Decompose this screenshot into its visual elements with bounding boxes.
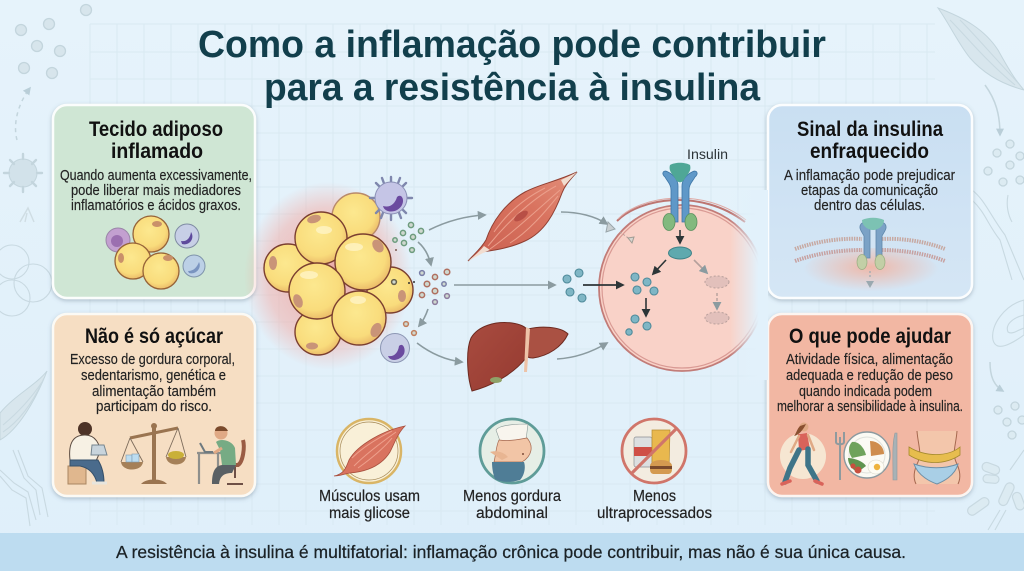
signalling arrows and molecules <box>563 222 729 335</box>
benefit: muscles use more glucose <box>319 419 420 522</box>
heading: tecido adiposo: Tecido adiposo <box>89 117 223 141</box>
arrows to target cell <box>557 212 607 359</box>
label: músculos usam mais glicose: mais glicose <box>329 505 410 522</box>
icon: insulin receptor <box>663 163 697 230</box>
icon: spiky immune cell <box>370 177 412 220</box>
label: menos gordura abdominal <box>463 488 561 522</box>
panel: o que pode ajudar <box>768 314 972 496</box>
background decoration: right side <box>938 8 1024 530</box>
text: o que pode ajudar body <box>777 352 963 415</box>
panel: não é só açúcar <box>53 314 255 496</box>
text: não é só açúcar body: participam do risco. <box>96 399 212 415</box>
heading: sinal da insulina <box>797 117 944 163</box>
inflammatory mediators <box>392 222 450 335</box>
label: músculos usam mais glicose: Músculos usam <box>319 488 420 505</box>
text: sinal da insulina body <box>784 168 955 214</box>
icon: person at desk <box>197 426 244 484</box>
panel: sinal da insulina enfraquecido <box>768 105 972 298</box>
fat cell cluster <box>264 193 413 355</box>
text: tecido adiposo body <box>60 168 252 214</box>
benefit: fewer ultra-processed foods <box>597 419 712 522</box>
text: tecido adiposo body: inflamatórios e ácidos graxos. <box>71 198 241 214</box>
icon: walking woman <box>780 422 826 484</box>
label: menos gordura abdominal: Menos gordura <box>463 488 561 505</box>
inflammatory glow <box>244 182 412 370</box>
icon: muscle <box>468 172 577 261</box>
text: sinal da insulina body: etapas da comunicação <box>801 183 938 199</box>
text: não é só açúcar body: sedentarismo, genética e <box>81 368 226 384</box>
footer banner <box>0 533 1024 571</box>
heading: tecido adiposo <box>89 117 223 163</box>
panel: tecido adiposo inflamado <box>53 105 255 298</box>
heading: sinal da insulina: enfraquecido <box>810 139 929 163</box>
background decoration: left side <box>0 4 92 526</box>
heading: o que pode ajudar: O que pode ajudar <box>789 324 952 348</box>
icon: waist with measuring tape <box>909 431 960 484</box>
text: tecido adiposo body: Quando aumenta excessivamente, <box>60 168 252 184</box>
footer text: A resistência à insulina é multifatorial: inflamação crônica pode contribuir, mas não é sua única causa. <box>116 542 906 562</box>
label: menos ultraprocessados <box>597 488 712 522</box>
arrows from fat tissue to organs <box>417 215 555 362</box>
icon: muscle circle <box>334 419 405 483</box>
heading: sinal da insulina: Sinal da insulina <box>797 117 944 141</box>
diagram: target cell <box>563 146 768 380</box>
icon: liver <box>468 323 568 391</box>
text: o que pode ajudar body: Atividade física, alimentação <box>786 352 953 368</box>
icon: weakened receptor on membrane <box>795 218 945 296</box>
label: menos ultraprocessados: ultraprocessados <box>597 505 712 522</box>
text: o que pode ajudar body: melhorar a sensibilidade à insulina. <box>777 399 963 415</box>
icon: person seated with laptop <box>68 422 107 484</box>
icon: lower immune cell <box>380 334 410 362</box>
icon: fat and immune cells <box>106 216 205 289</box>
text: não é só açúcar body <box>70 352 235 415</box>
text: sinal da insulina body: A inflamação pode prejudicar <box>784 168 955 184</box>
label: músculos usam mais glicose <box>319 488 420 522</box>
benefit: less abdominal fat <box>463 419 561 522</box>
text: não é só açúcar body: alimentação também <box>92 384 216 400</box>
title: Como a inflamação pode contribuir <box>198 24 826 66</box>
heading: tecido adiposo: inflamado <box>111 139 203 163</box>
icon: crossed-out processed food <box>622 419 686 483</box>
label: insulin: Insulin <box>687 146 728 162</box>
text: não é só açúcar body: Excesso de gordura corporal, <box>70 352 235 368</box>
icon: belly circle <box>480 419 544 483</box>
icon: balance scale <box>121 423 186 484</box>
text: tecido adiposo body: pode liberar mais mediadores <box>71 183 241 199</box>
icon: healthy plate with fork and knife <box>836 432 897 480</box>
label: menos gordura abdominal: abdominal <box>476 505 548 522</box>
title <box>198 24 826 109</box>
text: o que pode ajudar body: adequada e redução de peso <box>786 368 953 384</box>
label: menos ultraprocessados: Menos <box>633 488 676 505</box>
text: sinal da insulina body: dentro das células. <box>814 198 925 214</box>
heading: não é só açúcar: Não é só açúcar <box>85 324 224 348</box>
title: para a resistência à insulina <box>264 67 761 109</box>
text: o que pode ajudar body: quando indicada podem <box>799 384 932 400</box>
